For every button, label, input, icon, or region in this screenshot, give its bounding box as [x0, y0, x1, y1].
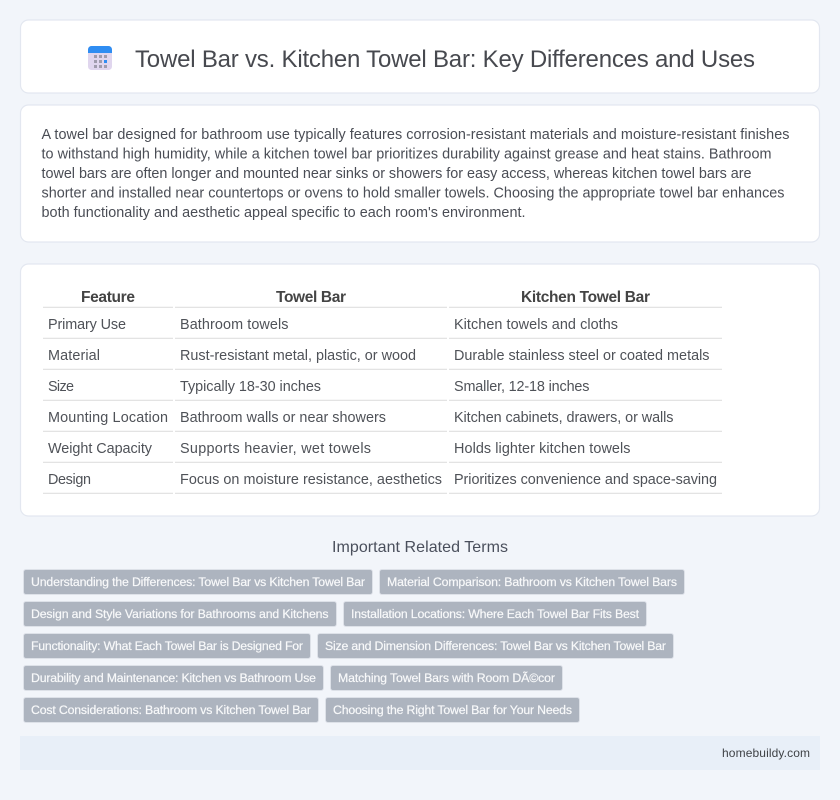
table row: weight capacity [48, 441, 630, 457]
table row: design: Prioritizes convenience and space-saving [454, 472, 717, 488]
tag [24, 666, 324, 690]
footer [20, 736, 820, 770]
table row: design: Focus on moisture resistance, aesthetics [180, 472, 442, 488]
tag: Material Comparison: Bathroom vs Kitchen Towel Bars [387, 575, 677, 589]
table row: mounting location: Bathroom walls or near showers [180, 410, 386, 426]
table header row: Towel Bar [276, 289, 346, 306]
text block: description: towel bars are often longer and mounted near sinks or showers for easy access, whereas kitchen towel bars are [42, 166, 752, 182]
title: Towel Bar vs. Kitchen Towel Bar: Key Differences and Uses [135, 46, 755, 73]
table row: material: Rust-resistant metal, plastic, or wood [180, 348, 416, 364]
table row: primary use: Primary Use [48, 317, 126, 333]
table row: material: Material [48, 348, 100, 364]
panel: comparison table [20, 264, 820, 516]
tag: Choosing the Right Towel Bar for Your Needs [333, 703, 572, 717]
tag [24, 602, 336, 626]
text block: description: to withstand high humidity, while a kitchen towel bar prioritizes durability against grease and heat stains. Bathroom [42, 146, 772, 162]
tag [380, 570, 684, 594]
table row: size: Typically 18-30 inches [180, 379, 321, 395]
tag [344, 602, 646, 626]
footer credit: homebuildy.com [722, 746, 810, 760]
tag [24, 698, 318, 722]
text block: description: shorter and installed near countertops or ovens to hold smaller towels. Choosing the appropriate towel bar enhances [42, 186, 784, 202]
tag: Functionality: What Each Towel Bar is Designed For [31, 639, 303, 653]
tag [326, 698, 580, 722]
table row: mounting location: Mounting Location [48, 410, 168, 426]
tag [318, 634, 674, 658]
table row: primary use [48, 317, 618, 333]
table row: size: Smaller, 12-18 inches [454, 379, 590, 395]
table row: material: Durable stainless steel or coated metals [454, 348, 710, 364]
heading: important related terms: Important Related Terms [332, 539, 508, 556]
tag: Matching Towel Bars with Room DÃ©cor [338, 671, 555, 685]
table header row: Feature [81, 289, 135, 306]
tag [24, 634, 310, 658]
tag: Installation Locations: Where Each Towel Bar Fits Best [351, 607, 640, 621]
tag: Size and Dimension Differences: Towel Bar vs Kitchen Towel Bar [325, 639, 666, 653]
table row: size: Size [48, 379, 74, 395]
table row: weight capacity: Weight Capacity [48, 441, 153, 457]
table row: weight capacity: Holds lighter kitchen towels [454, 441, 630, 457]
table row: material [48, 348, 710, 364]
tag: Durability and Maintenance: Kitchen vs Bathroom Use [31, 671, 316, 685]
text block: description: A towel bar designed for bathroom use typically features corrosion-resistant materials and moisture-resistant finishes [42, 127, 790, 143]
table row: primary use: Bathroom towels [180, 317, 288, 333]
tag [330, 666, 562, 690]
table row: design: Design [48, 472, 91, 488]
panel: header [20, 20, 820, 93]
table row: primary use: Kitchen towels and cloths [454, 317, 618, 333]
tag: Design and Style Variations for Bathrooms and Kitchens [31, 607, 328, 621]
table row: design [48, 472, 717, 488]
icon: calendar [88, 46, 112, 70]
table header row: Kitchen Towel Bar [521, 289, 650, 306]
tag [24, 570, 372, 594]
table header row [81, 289, 650, 306]
table row: mounting location [48, 410, 674, 426]
panel: intro paragraph [20, 105, 820, 242]
table row: mounting location: Kitchen cabinets, drawers, or walls [454, 410, 674, 426]
tag list [24, 570, 684, 722]
text block: description [42, 127, 790, 221]
tag: Understanding the Differences: Towel Bar vs Kitchen Towel Bar [31, 575, 365, 589]
text block: description: both functionality and aesthetic appeal specific to each room's environment. [42, 205, 526, 221]
table row: size [48, 379, 590, 395]
tag: Cost Considerations: Bathroom vs Kitchen Towel Bar [31, 703, 311, 717]
table row: weight capacity: Supports heavier, wet towels [180, 441, 371, 457]
